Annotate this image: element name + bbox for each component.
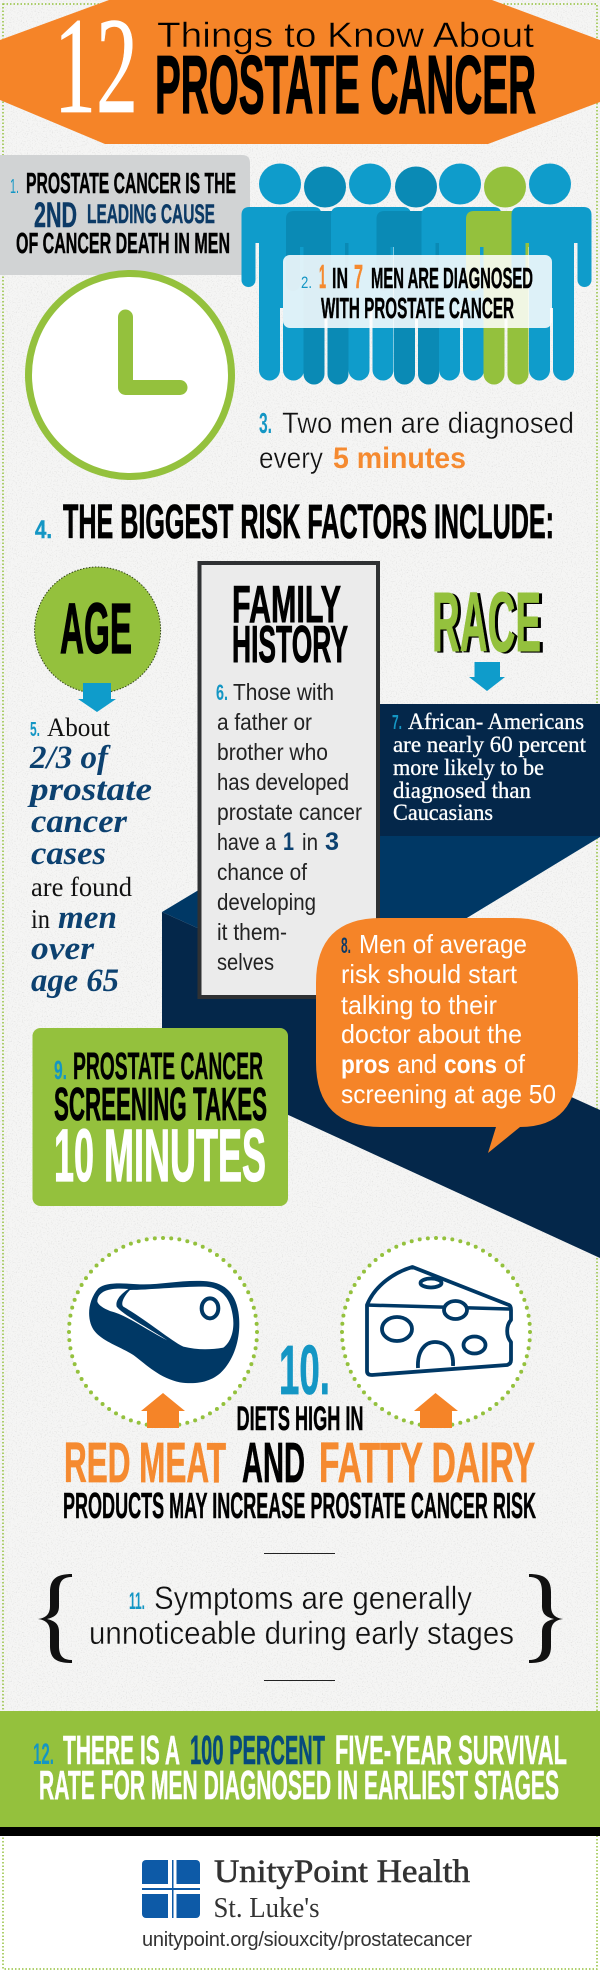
panel: fact 2 one in seven: 7 (354, 258, 363, 295)
callout: fact 8 speech bubble: 8. (341, 933, 351, 958)
panel: family history: chance of (217, 859, 308, 885)
icon: seven men (242, 164, 592, 384)
panel: fact 1 second leading cause: 1. (10, 176, 19, 198)
icon: left brace (38, 1574, 72, 1663)
text: fact 5: cancer (31, 804, 128, 840)
icon: cheese in dotted circle (342, 1238, 530, 1426)
text: fact 5: are found (31, 872, 132, 902)
panel: fact 1 second leading cause: 2ND (34, 196, 77, 235)
arrow: race down (469, 662, 505, 691)
panel: family history: have a (217, 829, 276, 855)
panel: family history: FAMILY (232, 576, 341, 634)
text: fact 3: every (259, 442, 323, 475)
panel: family history: has developed (217, 769, 349, 795)
panel: fact 9 screening: 10 MINUTES (54, 1114, 266, 1197)
text: fact 5 (27, 713, 152, 999)
text: fact 10 diets: 10. (279, 1331, 330, 1409)
text: fact 11 symptoms (89, 1580, 514, 1651)
panel: family history: selves (217, 949, 274, 975)
callout: fact 8 speech bubble: pros (341, 1049, 390, 1079)
title line one: Things to Know About (157, 16, 534, 55)
text: fact 3 (259, 407, 574, 475)
logo: UnityPoint Health St. Luke's (142, 1854, 472, 1951)
panel: fact 2 one in seven (283, 255, 552, 328)
panel: fact 2 one in seven: 1 (319, 258, 326, 295)
text: fact 7: 7. (392, 712, 402, 734)
text: fact 5: age 65 (31, 963, 119, 999)
text: fact 10 diets (63, 1331, 536, 1526)
arrow: steak up (141, 1393, 185, 1428)
text: fact 7: more likely to be (393, 755, 544, 780)
callout: fact 8 speech bubble: Men of average (359, 929, 527, 959)
heading: race (432, 575, 544, 670)
text: fact 7: diagnosed than (393, 778, 531, 803)
panel: fact 12 survival band (0, 1711, 600, 1836)
panel: family history: it them- (217, 919, 287, 945)
text: fact 11 symptoms: Symptoms are generally (154, 1580, 472, 1616)
logo: UnityPoint Health St. Luke's: St. Luke's (214, 1893, 320, 1924)
background ribbon (162, 704, 600, 1258)
text: fact 7 (392, 709, 587, 825)
panel: family history: prostate cancer (217, 799, 362, 825)
text: fact 5: over (31, 931, 95, 967)
text: fact 3: Two men are diagnosed (282, 407, 574, 440)
panel: fact 2 one in seven: IN (332, 263, 348, 295)
panel: family history (200, 563, 378, 997)
text: fact 5: 5. (30, 719, 40, 741)
text: fact 5: in (31, 904, 50, 934)
text: fact 5: About (47, 713, 111, 742)
callout: fact 8 speech bubble: cons (444, 1049, 497, 1079)
text: fact 5: men (58, 900, 117, 936)
text: fact 10 diets: DIETS HIGH IN (236, 1400, 364, 1438)
icon: steak in dotted circle (69, 1238, 257, 1426)
panel: fact 2 one in seven: 2. (301, 273, 312, 292)
panel: family history: HISTORY (232, 616, 348, 674)
panel: fact 1 second leading cause: OF CANCER DEATH IN MEN (16, 228, 230, 260)
text: fact 3: 3. (259, 408, 272, 440)
panel: fact 9 screening: SCREENING TAKES (54, 1078, 267, 1130)
panel: family history: 1 (283, 828, 294, 856)
callout: fact 8 speech bubble: doctor about the (341, 1019, 522, 1049)
text: fact 7: Caucasians (393, 800, 493, 825)
text: fact 7: are nearly 60 percent (393, 732, 587, 757)
panel: family history: Those with (233, 679, 334, 705)
text: fact 5: prostate (27, 772, 152, 808)
text: fact 5: cases (31, 836, 106, 872)
panel: family history: in (302, 829, 318, 855)
text: fact 3: 5 minutes (333, 442, 466, 475)
panel: fact 1 second leading cause (0, 155, 250, 275)
panel: fact 9 screening: PROSTATE CANCER (73, 1046, 263, 1088)
text: fact 11 symptoms: unnoticeable during early stages (89, 1615, 514, 1651)
panel: fact 9 screening: 9. (54, 1055, 67, 1085)
callout: fact 8 speech bubble: risk should start (341, 959, 518, 989)
panel: fact 1 second leading cause: PROSTATE CANCER IS THE (26, 168, 236, 200)
callout: fact 8 speech bubble: of (504, 1049, 526, 1079)
callout: fact 8 speech bubble: talking to their (341, 990, 497, 1020)
badge: age (35, 567, 161, 693)
text: fact 10 diets: AND (242, 1431, 305, 1495)
text: fact 10 diets: RED MEAT (64, 1431, 226, 1495)
panel: fact 12 survival band: 12. (33, 1738, 54, 1771)
panel: family history: brother who (217, 739, 328, 765)
icon: clock (28, 274, 232, 476)
panel: fact 9 screening (32, 1028, 288, 1206)
panel: fact 1 second leading cause: LEADING CAUSE (87, 199, 215, 229)
panel: fact 12 survival band: 100 PERCENT (190, 1727, 325, 1773)
text: fact 11 symptoms: 11. (129, 1588, 145, 1615)
callout: fact 8 speech bubble: screening at age 50 (341, 1079, 556, 1109)
panel: family history: a father or (217, 709, 312, 735)
panel: family history: 3 (325, 828, 339, 856)
panel: family history: developing (217, 889, 316, 915)
text: fact 5: 2/3 of (29, 740, 111, 776)
badge: age: AGE (60, 590, 132, 669)
logo: UnityPoint Health St. Luke's: UnityPoint Health (214, 1854, 471, 1890)
icon: right brace (529, 1574, 563, 1663)
logo: UnityPoint Health St. Luke's: unitypoint.org/siouxcity/prostatecancer (142, 1929, 472, 1951)
arrow: cheese up (414, 1393, 458, 1428)
header banner (0, 0, 600, 144)
heading: fact 4 risk factors: 4. (35, 516, 52, 544)
text: fact 7: African- Americans (408, 709, 584, 734)
callout: fact 8 speech bubble (316, 918, 578, 1153)
panel: family history: 6. (216, 680, 228, 705)
panel: fact 12 survival band: THERE IS A (63, 1727, 180, 1773)
arrow: age down (78, 683, 116, 712)
icon: logo cross (142, 1860, 200, 1918)
callout: fact 8 speech bubble: and (397, 1049, 437, 1079)
